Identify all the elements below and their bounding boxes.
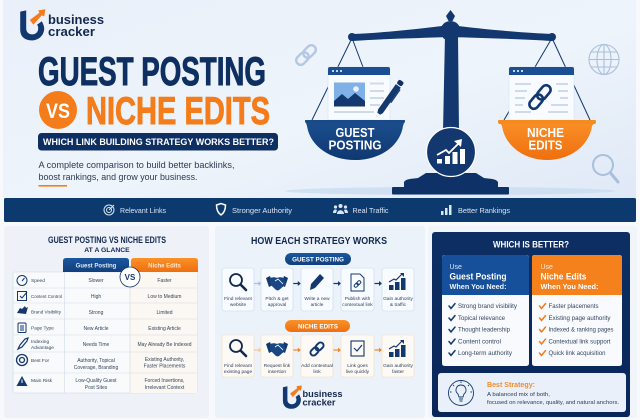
logo: business cracker footer: business (302, 389, 342, 400)
step: write (301, 268, 333, 311)
logo: business cracker: business (48, 13, 104, 27)
subtitle pill (38, 133, 278, 150)
checklist: Long-term authority (458, 351, 512, 357)
step: find website (222, 268, 254, 311)
pan bowl (305, 120, 405, 160)
row: page type: Page Type (31, 326, 54, 332)
row: speed (17, 276, 172, 286)
checklist: Strong brand visibility (458, 304, 517, 310)
panel: at a glance table (4, 226, 209, 418)
benefit: better rankings (441, 205, 510, 215)
step: pitch (261, 268, 293, 311)
step: find website: Find relevant (224, 296, 253, 302)
row: speed: Speed (31, 278, 45, 284)
pan bowl (498, 120, 596, 160)
step: find page: Find relevant (224, 363, 253, 369)
column: guest posting: When You Need: (450, 282, 506, 291)
benefit: real traffic (333, 204, 389, 215)
row: main risk: Low-Quality Guest (75, 378, 117, 384)
panel: how each strategy works (215, 226, 425, 418)
benefit: stronger authority (216, 204, 292, 215)
column: niche edits: Use (540, 264, 553, 271)
callout: best strategy: A balanced mix of both, (487, 392, 550, 398)
scale shadow (285, 187, 615, 195)
row: content control: Content Control (31, 294, 62, 300)
step: live: live quickly (346, 369, 370, 375)
column: niche edits: When You Need: (540, 282, 598, 291)
step: request (261, 335, 293, 377)
balance scale (312, 10, 590, 194)
badge: vs (39, 91, 77, 129)
callout: best strategy: focused on relevance, quality, and natural anchors. (487, 400, 619, 406)
column: guest posting: Use (450, 264, 462, 271)
row: content control: Low to Medium (148, 294, 181, 300)
beam ends (348, 33, 556, 41)
step: add link: Add contextual (301, 363, 333, 369)
scale base (392, 173, 509, 194)
row: content control: High (91, 294, 101, 300)
column: niche edits: Niche Edits (540, 272, 587, 282)
guest posting flow (222, 268, 414, 311)
row: main risk: Main Risk (31, 378, 53, 384)
subtitle pill: WHICH LINK BUILDING STRATEGY WORKS BETTER? (43, 137, 274, 147)
heading: which is better: WHICH IS BETTER? (493, 240, 569, 250)
row: best for: Faster Placements (144, 364, 186, 370)
benefit: relevant links: Relevant Links (120, 206, 166, 215)
scale hub (440, 10, 460, 41)
row: best for: Coverage, Branding (74, 365, 118, 371)
row: brand visibility (17, 306, 173, 316)
row: main risk: Post Sites (85, 385, 108, 391)
heading: at a glance: GUEST POSTING VS NICHE EDITS (48, 235, 166, 246)
heading: at a glance (48, 235, 166, 254)
right pan: niche edits (498, 67, 596, 160)
vs badge (120, 267, 140, 287)
scale column (443, 35, 459, 131)
step: write: Write a new (304, 296, 330, 302)
icon: pen (374, 79, 405, 119)
description text: boost rankings, and grow your business. (38, 172, 198, 182)
step: pitch: approval (268, 302, 286, 308)
step: add link: link (313, 369, 321, 375)
checklist (449, 304, 517, 357)
step: publish: Publish with (345, 296, 371, 302)
row: indexing advantage (18, 338, 192, 351)
niche edits flow (222, 335, 414, 377)
heading: at a glance: AT A GLANCE (84, 247, 130, 254)
row: best for: Authority, Topical (77, 358, 115, 364)
step: live: Link goes (347, 363, 368, 369)
benefit: real traffic: Real Traffic (352, 206, 389, 215)
checklist: Topical relevance (458, 316, 506, 322)
title: niche edits: NICHE EDITS (86, 90, 270, 133)
checklist: Content control (458, 340, 501, 346)
growth medallion (426, 128, 476, 176)
row: page type: New Article (83, 326, 109, 332)
step: gain authority (382, 268, 414, 311)
icon: light bulb (448, 380, 474, 406)
step: publish (341, 268, 374, 311)
description text (38, 160, 234, 187)
row: main risk: Irrelevant Context (145, 385, 185, 391)
arrow (254, 348, 262, 352)
badge: vs: VS (46, 100, 70, 123)
article card (509, 67, 574, 120)
logo: business cracker footer (283, 385, 342, 409)
checklist (540, 304, 614, 357)
column header: guest posting: Guest Posting (76, 264, 117, 270)
step: gain authority (382, 335, 414, 377)
article card (328, 67, 390, 120)
row: speed: Slower (88, 278, 104, 284)
logo: business cracker (20, 9, 104, 40)
scale strings (312, 38, 590, 120)
checklist: Thought leadership (458, 328, 511, 334)
row: brand visibility: Brand Visibility (31, 310, 62, 316)
step: find page: existing page (224, 369, 252, 375)
row: page type: Existing Article (148, 326, 181, 332)
row: indexing advantage: Needs Time (83, 342, 110, 348)
logo: business cracker footer: cracker (302, 398, 336, 408)
row: best for: Existing Authority, (145, 357, 184, 363)
row: speed: Faster (157, 278, 172, 284)
step: publish: contextual link (342, 302, 373, 308)
panel: which is better (428, 226, 637, 418)
checklist: Faster placements (548, 304, 598, 310)
right pan: niche edits: NICHE (527, 125, 564, 140)
column header: niche edits: Niche Edits (148, 264, 181, 270)
step: gain authority: faster (392, 369, 404, 375)
step: find page (222, 335, 254, 377)
pill: niche edits (285, 320, 350, 332)
step: live (341, 335, 374, 377)
step: gain authority: Gain authority (383, 296, 414, 302)
row: content control (18, 292, 181, 300)
callout: best strategy (438, 373, 626, 412)
benefit: relevant links (104, 205, 166, 215)
step: gain authority: & traffic (390, 302, 407, 308)
logo: business cracker: cracker (48, 25, 95, 39)
step: gain authority: Gain authority (383, 363, 414, 369)
step: pitch: Pitch & get (265, 296, 289, 302)
row: indexing advantage: Indexing (31, 339, 49, 345)
description text: A complete comparison to build better backlinks, (38, 160, 234, 170)
decorative icon: magnifier (593, 155, 618, 182)
callout: best strategy: Best Strategy: (487, 382, 535, 389)
checklist: Indexed & ranking pages (548, 328, 614, 334)
pill: guest posting: GUEST POSTING (292, 256, 344, 264)
heading: how each strategy works: HOW EACH STRATEGY WORKS (251, 236, 387, 247)
row: brand visibility: Limited (156, 310, 173, 316)
vs badge: VS (125, 273, 136, 282)
pill: guest posting (285, 253, 351, 265)
panel: hero banner (3, 0, 636, 198)
left pan: guest posting (305, 67, 405, 160)
row: main risk (16, 376, 185, 391)
row: main risk: Forced Insertions, (144, 378, 185, 384)
left pan: guest posting: GUEST (336, 125, 375, 140)
column: niche edits (532, 255, 622, 366)
right pan: niche edits: EDITS (528, 138, 563, 152)
row: best for: Best For (31, 358, 50, 364)
arrow (334, 348, 341, 352)
pill: niche edits: NICHE EDITS (298, 324, 338, 330)
arrow (293, 281, 301, 286)
step: find website: website (230, 302, 246, 308)
arrow (374, 348, 382, 352)
checklist: Contextual link support (548, 340, 611, 346)
table grid (13, 272, 197, 393)
benefits bar (4, 198, 636, 222)
step: request: insertion (268, 369, 286, 375)
checklist: Existing page authority (548, 316, 610, 322)
title: guest posting: GUEST POSTING (38, 50, 266, 94)
arrow (254, 281, 262, 286)
benefit: stronger authority: Stronger Authority (232, 206, 292, 215)
decorative icon: chain (294, 43, 318, 67)
row: best for (16, 354, 186, 371)
step: add link (301, 335, 333, 377)
column: guest posting (442, 255, 529, 366)
step: write: article (311, 302, 324, 308)
decorative icon: globe (589, 44, 619, 74)
column: guest posting: Guest Posting (450, 272, 506, 282)
benefit: better rankings: Better Rankings (458, 206, 510, 215)
arrow (334, 281, 341, 286)
step: request: Request link (264, 363, 291, 369)
scale beam (352, 25, 552, 41)
left pan: guest posting: POSTING (328, 138, 382, 152)
checklist: Quick link acquisition (548, 351, 606, 357)
arrow (293, 348, 301, 352)
column header: guest posting (63, 258, 129, 272)
row: brand visibility: Strong (89, 310, 104, 316)
arrow (374, 281, 382, 286)
row: indexing advantage: Advantage (31, 345, 54, 351)
column header: niche edits (131, 258, 198, 272)
row: page type (18, 323, 181, 332)
row: indexing advantage: May Already Be Indexed (138, 342, 192, 348)
